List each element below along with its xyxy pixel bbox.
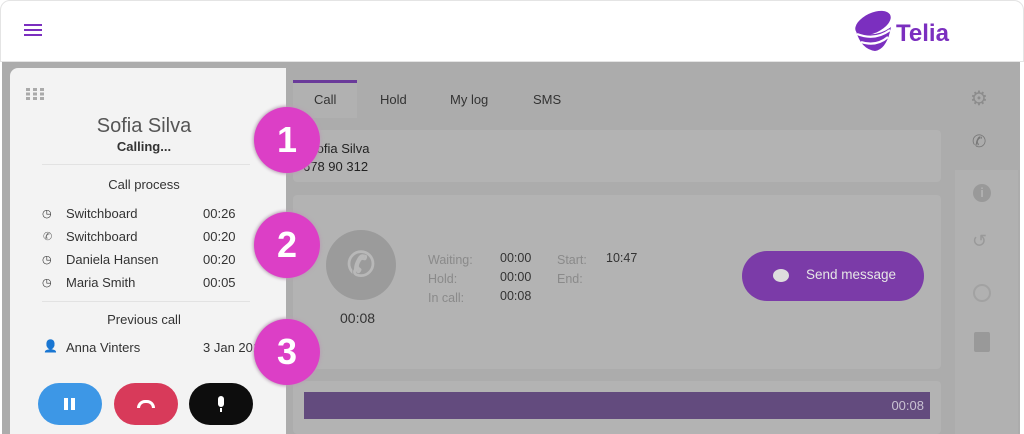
panel: left call panel — [10, 68, 286, 434]
icon: history: ↺ — [972, 231, 987, 251]
badge 1: 1 — [277, 119, 297, 160]
list: call process: Switchboard — [66, 206, 138, 221]
icon: settings: ⚙ — [970, 88, 988, 110]
icon: info — [973, 184, 991, 202]
icon: globe — [973, 284, 991, 302]
card: progress bar: 00:08 — [891, 398, 924, 413]
icon: phone circle: ✆ — [347, 246, 375, 284]
call stats: 00:00 — [500, 251, 531, 265]
card: call details: 00:08 — [340, 310, 375, 326]
list: call process: 00:20 — [203, 229, 236, 244]
call stats — [428, 251, 637, 305]
call stats: End: — [557, 272, 583, 286]
panel: left call panel: Calling... — [117, 139, 171, 154]
tabs: My log — [450, 92, 488, 107]
badge 1 — [254, 107, 320, 173]
badge 3: 3 — [277, 331, 297, 372]
previous call row — [43, 339, 267, 355]
list: call process: ◷ — [42, 254, 52, 266]
list: call process: 00:26 — [203, 206, 236, 221]
previous call row: Anna Vinters — [66, 340, 140, 355]
tabs: Hold — [380, 92, 407, 107]
call stats: 00:00 — [500, 270, 531, 284]
list: call process — [42, 206, 236, 290]
card: contact info: 678 90 312 — [303, 159, 368, 174]
icon: clipboard — [974, 332, 990, 352]
button: hang up — [114, 383, 178, 425]
icon: phone circle — [326, 230, 396, 300]
logo: Telia: Telia — [896, 20, 950, 47]
icon: hamburger menu — [24, 24, 42, 36]
right sidebar — [950, 68, 1018, 434]
list: call process: Maria Smith — [66, 275, 135, 290]
call stats: 00:08 — [500, 289, 531, 303]
call stats: In call: — [428, 291, 464, 305]
list: call process: 00:20 — [203, 252, 236, 267]
list: call process: ◷ — [42, 208, 52, 220]
tabs — [293, 80, 561, 107]
icon: info: i — [980, 185, 984, 200]
list: call process: Switchboard — [66, 229, 138, 244]
panel: left call panel: Sofia Silva — [97, 115, 191, 137]
list: call process: ✆ — [43, 231, 52, 243]
previous call row: 3 Jan 2019 — [203, 340, 267, 355]
button: send message: Send message — [806, 267, 896, 282]
call stats: Start: — [557, 253, 587, 267]
panel: left call panel: Previous call — [107, 312, 181, 327]
call stats: Hold: — [428, 272, 457, 286]
badge 2 — [254, 212, 320, 278]
list: call process: Daniela Hansen — [66, 252, 159, 267]
logo: Telia — [855, 10, 950, 51]
button: mute — [189, 383, 253, 425]
card: call details — [293, 195, 941, 369]
card: contact info — [293, 130, 941, 182]
panel: left call panel: Call process — [108, 177, 180, 192]
call stats: 10:47 — [606, 251, 637, 265]
previous call row: 👤 — [43, 339, 58, 353]
tabs: Call — [314, 92, 336, 107]
header — [0, 0, 1024, 62]
icon: dialpad — [26, 88, 44, 100]
call stats: Waiting: — [428, 253, 473, 267]
tabs: SMS — [533, 92, 561, 107]
list: call process: 00:05 — [203, 275, 236, 290]
button: pause — [38, 383, 102, 425]
card: progress bar — [293, 381, 941, 434]
card: contact info: Sofia Silva — [308, 141, 369, 156]
badge 2: 2 — [277, 224, 297, 265]
badge 3 — [254, 319, 320, 385]
list: call process: ◷ — [42, 277, 52, 289]
button: send message — [742, 251, 924, 301]
icon: phone: ✆ — [972, 132, 986, 151]
